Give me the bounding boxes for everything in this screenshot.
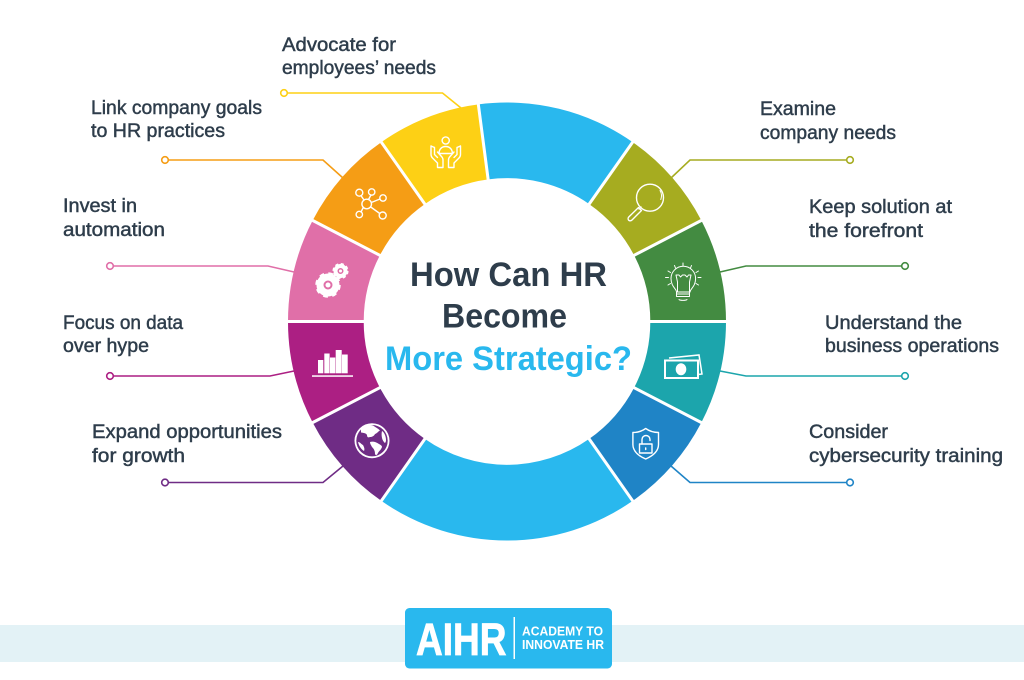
leader line: operations (720, 371, 908, 379)
icon: shield with open padlock (633, 428, 658, 459)
title line 2: Become (442, 298, 567, 336)
logo tagline: ACADEMY TO (522, 624, 603, 638)
logo tagline: INNOVATE HR (522, 637, 605, 652)
label: cybersecurity (809, 422, 1003, 467)
leader line: examine (671, 157, 853, 178)
segment: olive (589, 142, 701, 255)
icon: network nodes (356, 189, 386, 219)
label: advocate (282, 35, 436, 79)
logo wordmark: AIHR (416, 614, 506, 665)
segment: orange (313, 142, 425, 255)
leader line: advocate (281, 90, 461, 108)
icon: hands holding person (431, 137, 460, 168)
logo tagline (522, 624, 605, 652)
label: data: Focus on data (63, 313, 183, 334)
label: examine: company needs (760, 123, 896, 144)
label: examine: Examine (760, 99, 836, 120)
label: data: over hype (63, 336, 149, 357)
icon: magnifier (628, 184, 664, 221)
label: examine (760, 99, 896, 144)
title (385, 256, 632, 378)
label: growth: for growth (92, 446, 185, 467)
title line 1: How Can HR (410, 256, 607, 294)
title line 3: More Strategic? (385, 340, 632, 378)
segment: yellow (381, 104, 488, 204)
label: automation: Invest in (63, 196, 137, 217)
icon: light bulb (666, 263, 701, 300)
segment: pink (288, 220, 380, 322)
label: operations (825, 313, 999, 357)
footer band (0, 625, 1024, 662)
label: cybersecurity: Consider (809, 422, 889, 443)
icon: banknotes (665, 355, 702, 378)
leader line: data (107, 371, 294, 379)
label: advocate: Advocate for (282, 35, 397, 56)
leader line: cybersecurity (671, 466, 853, 486)
leader line: automation (107, 263, 294, 272)
segment: purple (313, 388, 425, 501)
label: automation (63, 196, 165, 241)
donut ring (284, 98, 730, 540)
segment: bottom blue (381, 439, 633, 540)
label: link goals: Link company goals (91, 98, 262, 119)
label: data (63, 313, 183, 357)
segment: dark blue (589, 388, 701, 501)
icon: gears (317, 264, 347, 296)
label: growth (92, 422, 282, 467)
label: link goals: to HR practices (91, 121, 225, 142)
label: growth: Expand opportunities (92, 422, 282, 443)
segment: top blue (478, 103, 633, 204)
segment: magenta (288, 322, 380, 423)
leader line: link goals (162, 157, 343, 178)
label: solution: the forefront (809, 221, 924, 242)
label: advocate: employees’ needs (282, 58, 436, 79)
leader line: solution (720, 263, 908, 272)
label: operations: Understand the (825, 313, 962, 334)
label: operations: business operations (825, 336, 999, 357)
label: link goals (91, 98, 262, 142)
label: automation: automation (63, 220, 165, 241)
segment: green (634, 220, 726, 322)
icon: globe (354, 423, 390, 458)
label: cybersecurity: cybersecurity training (809, 446, 1003, 467)
icon: bar chart (312, 350, 353, 377)
leader line: growth (162, 466, 343, 486)
label: solution (809, 197, 953, 242)
segment: teal (634, 322, 726, 423)
logo (405, 608, 612, 668)
label: solution: Keep solution at (809, 197, 953, 218)
